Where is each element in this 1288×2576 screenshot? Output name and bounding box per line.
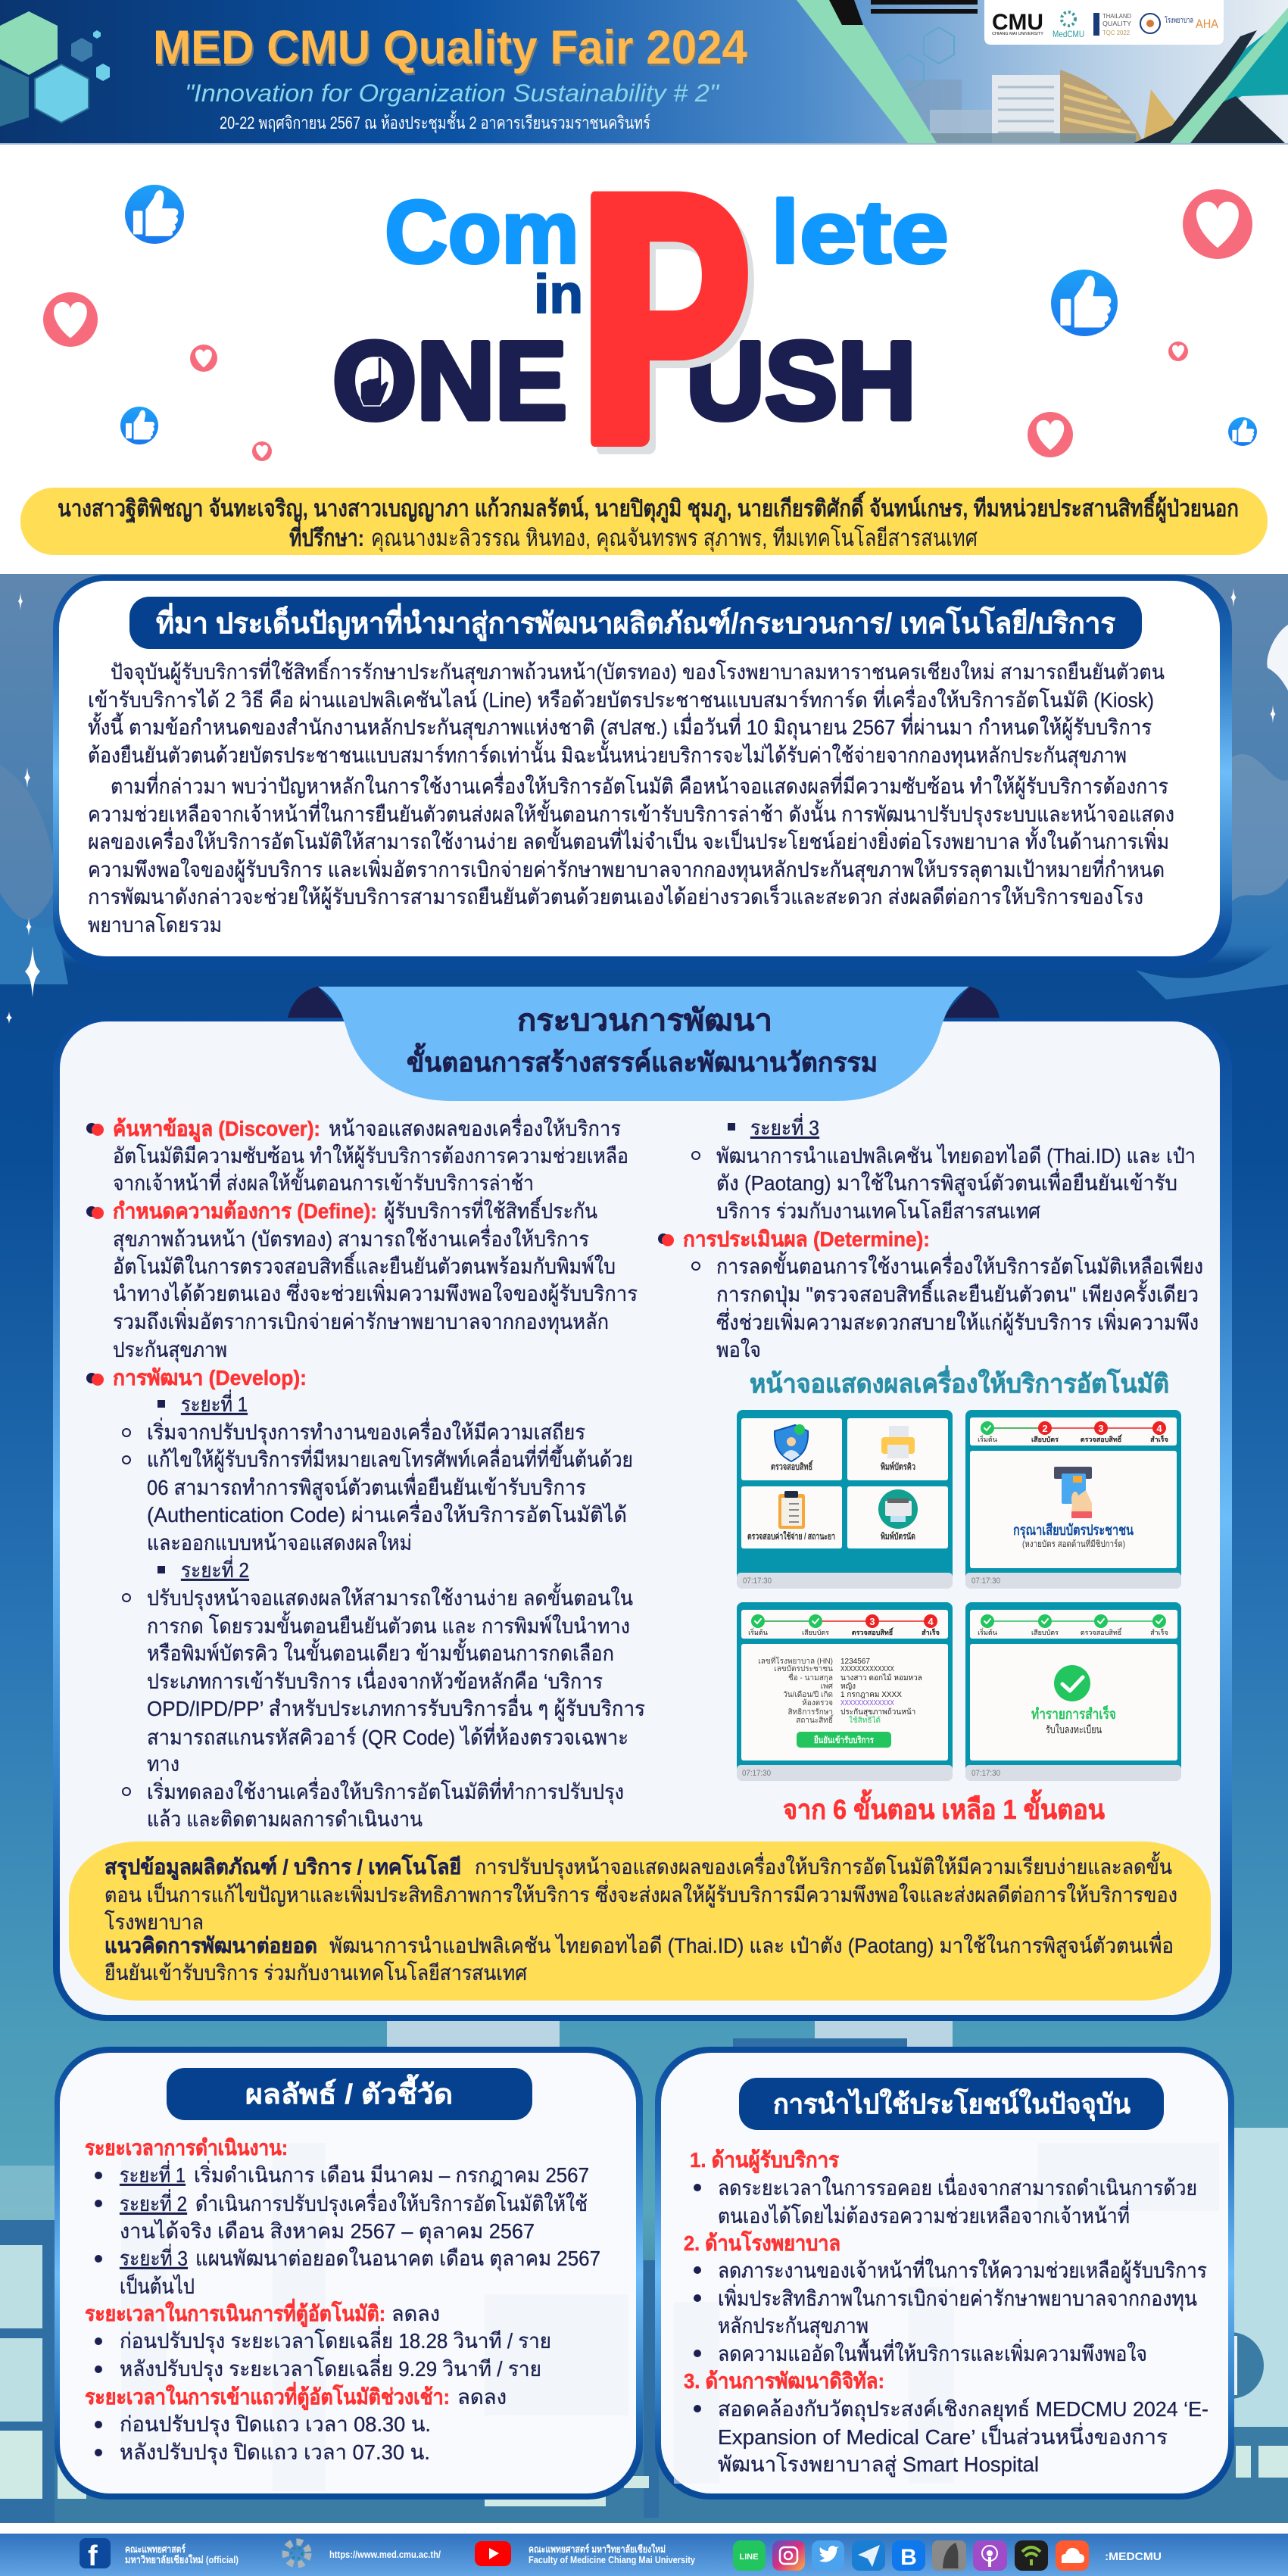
kiosk screen 2: insert card: สำเร็จ — [1150, 1434, 1168, 1443]
banner: partner logos: THAILAND — [1102, 13, 1131, 20]
text block: hospital: 2. ด้านโรงพยาบาล — [684, 2230, 840, 2255]
icon: copier — [878, 1489, 918, 1529]
kiosk screen 3: confirm details: สำเร็จ — [922, 1627, 940, 1636]
text block: hospital: เพิ่มประสิทธิภาพในการเบิกจ่ายค่ารักษาพยาบาลจากกองทุน — [718, 2284, 1197, 2312]
patient detail rows: ชื่อ - นามสกุล — [788, 1672, 833, 1683]
author and advisor pill — [20, 488, 1268, 555]
heading: kiosk screens: หน้าจอแสดงผลเครื่องให้บริการอัตโนมัติ — [750, 1365, 1169, 1399]
text block: service users: 1. ด้านผู้รับบริการ — [690, 2148, 839, 2173]
text block: kiosk walking time: หลังปรับปรุง ระยะเวลาโดยเฉลี่ย 9.29 วินาที / ราย — [120, 2354, 541, 2382]
kiosk screen 1: menu: ตรวจสอบสิทธิ์ — [771, 1460, 813, 1472]
text block: hospital: ลดความแออัดในพื้นที่ให้บริการและเพิ่มความพึงพอใจ — [718, 2338, 1147, 2365]
icon: clipboard — [778, 1491, 805, 1529]
kiosk screen 4: success: ตรวจสอบสิทธิ์ — [1081, 1627, 1123, 1636]
text block: operation period: แผนพัฒนาต่อยอดในอนาคต เดือน ตุลาคม 2567 — [195, 2246, 600, 2272]
banner: partner logos: MedCMU — [1053, 29, 1084, 39]
kiosk screen 4: success: รับใบลงทะเบียน — [1046, 1723, 1102, 1736]
text block: process steps left column: ปรับปรุงหน้าจอแสดงผลให้สามารถใช้งานง่าย ลดขั้นตอนใน — [147, 1583, 633, 1611]
summary box: ยืนยันเข้ารับบริการ ร่วมกับงานเทคโนโลยีสารสนเทศ — [104, 1960, 527, 1985]
text block: process steps left column: อัตโนมัติมีความซับซ้อน ทำให้ผู้รับบริการต้องการความช่วยเหลือ — [113, 1143, 628, 1169]
kiosk screen 3: confirm details: 1 กรกฎาคม XXXX — [840, 1691, 902, 1699]
kiosk screen 3: confirm details — [737, 1602, 953, 1781]
banner: title: MED CMU Quality Fair 2024 — [153, 21, 747, 74]
text block: hospital: ลดภาระงานของเจ้าหน้าที่ในการให้ความช่วยเหลือผู้รับบริการ — [718, 2256, 1207, 2284]
text block: process steps left column: เริ่มจากปรับปรุงการทำงานของเครื่องให้มีความเสถียร — [147, 1417, 585, 1445]
social media icons — [733, 2540, 1089, 2571]
text block: kiosk walking time: ลดลง — [391, 2302, 440, 2325]
text block: problem paragraphs: ทั้งนี้ ตามข้อกำหนดของสำนักงานหลักประกันสุขภาพแห่งชาติ (สปสช.) เมื่อวันที่ 10 มิถุนายน 2567 ที่ผ่านมา กำหนดให้ผู้รับบริการ — [88, 712, 1152, 741]
kiosk screen 3: confirm details: เริ่มต้น — [748, 1627, 768, 1636]
social handle: :MEDCMU — [1105, 2550, 1162, 2563]
bullet: discover — [86, 1123, 104, 1136]
text block: digital development — [684, 2369, 1208, 2478]
text block: process steps left column: ค้นหาข้อมูล (Discover): — [113, 1117, 320, 1142]
kiosk screen 3: confirm details: 3 — [869, 1616, 875, 1627]
banner: hexagon decoration — [0, 11, 110, 126]
text block: digital development: พัฒนาโรงพยาบาลสู่ Smart Hospital — [718, 2452, 1039, 2478]
logo title: Complete in One Push: lete — [771, 182, 949, 282]
text block: process steps left column: สามารถสแกนรหัสคิวอาร์ (QR Code) ได้ที่ห้องตรวจเฉพาะ — [147, 1723, 628, 1749]
text block: operation period: ระยะที่ 3 — [120, 2244, 188, 2270]
text block: process steps left column — [86, 1114, 645, 1831]
heading: benefits: การนำไปใช้ประโยชน์ในปัจจุบัน — [773, 2088, 1131, 2122]
text block: process steps left column: ระยะที่ 2 — [181, 1555, 249, 1582]
heading tab: development process: กระบวนการพัฒนา — [517, 1004, 772, 1037]
heading tab: development process — [288, 987, 1000, 1101]
bullet: develop — [86, 1373, 104, 1386]
text block: process steps right column: การกดปุ่ม "ตรวจสอบสิทธิ์และยืนยันตัวตน" เพียงครั้งเดียว — [716, 1279, 1199, 1308]
youtube label: คณะแพทยศาสตร์ มหาวิทยาลัยเชียงใหม่ — [529, 2543, 666, 2555]
summary box: แนวคิดการพัฒนาต่อยอด — [104, 1934, 317, 1957]
facebook label — [125, 2543, 239, 2565]
kiosk screen 1: menu — [737, 1410, 953, 1589]
text block: kiosk walking time: ระยะเวลาในการเนินการที่ตู้อัตโนมัติ: — [85, 2298, 385, 2327]
banner: partner logos: โรงพยาบาล — [1165, 15, 1193, 25]
text block: process steps right column: ระยะที่ 3 — [750, 1113, 819, 1140]
text block: process steps left column: นำทางได้ด้วยตนเอง ซึ่งจะช่วยเพิ่มความพึงพอใจของผู้รับบริการ — [113, 1279, 638, 1307]
text block: operation period: เป็นต้นไป — [120, 2273, 195, 2298]
youtube label: Faculty of Medicine Chiang Mai University — [529, 2554, 696, 2565]
banner: partner logos: CMU — [992, 10, 1043, 35]
text block: morning queue time: ลดลง — [457, 2385, 507, 2409]
text block: problem paragraphs: ผลของเครื่องให้บริการอัตโนมัติให้สามารถใช้งานง่าย ลดขั้นตอนที่ไม่จำเป็น จะเป็นประโยชน์อย่างยิ่งต่อโรงพยาบาล ทั้งในด้านการเพิ่ม — [88, 826, 1169, 853]
kiosk screen 1: menu: พิมพ์บัตรคิว — [881, 1461, 915, 1472]
logo title: Complete in One Push — [332, 119, 949, 525]
text block: process steps left column: จากเจ้าหน้าที่ ส่งผลให้ขั้นตอนการเข้ารับบริการล่าช้า — [113, 1168, 534, 1195]
banner: partner logos: AHA — [1196, 17, 1219, 31]
kiosk screen 2: insert card: ตรวจสอบสิทธิ์ — [1081, 1434, 1123, 1443]
kiosk screen 3: confirm details: XXXXXXXXXXXXX — [840, 1665, 894, 1673]
facebook label: คณะแพทยศาสตร์ — [125, 2543, 186, 2555]
text block: service users — [690, 2148, 1197, 2228]
kiosk screen 3: confirm details: 4 — [928, 1616, 934, 1627]
summary box: การปรับปรุงหน้าจอแสดงผลของเครื่องให้บริการอัตโนมัติให้มีความเรียบง่ายและลดขั้น — [475, 1851, 1172, 1880]
patient detail rows: เพศ — [821, 1683, 834, 1691]
text block: operation period: ระยะเวลาการดำเนินงาน: — [85, 2136, 288, 2160]
kiosk screen 2: insert card: กรุณาเสียบบัตรประชาชน — [1013, 1522, 1134, 1539]
text block: service users: ลดระยะเวลาในการรอคอย เนื่องจากสามารถดำเนินการด้วย — [718, 2173, 1197, 2200]
text block: process steps left column: ระยะที่ 1 — [181, 1389, 248, 1416]
text block: process steps left column: กำหนดความต้องการ (Define): — [113, 1199, 377, 1223]
heading: background and problem — [129, 597, 1142, 649]
text block: process steps right column: การลดขั้นตอนการใช้งานเครื่องให้บริการอัตโนมัติเหลือเพียง — [716, 1251, 1203, 1278]
kiosk screen 2: insert card: เริ่มต้น — [978, 1434, 997, 1443]
patient detail rows: สิทธิการรักษา — [788, 1708, 833, 1717]
kiosk screen 1: menu: พิมพ์บัตรนัด — [881, 1531, 915, 1542]
text block: process steps left column: และออกแบบหน้าจอแสดงผลใหม่ — [147, 1530, 412, 1555]
icon: shield — [775, 1424, 808, 1461]
banner: partner logos — [984, 0, 1224, 45]
author and advisor pill: ที่ปรึกษา: — [289, 521, 364, 551]
logo title: Complete in One Push: Com — [385, 182, 579, 282]
kiosk screen 4: success: เสียบบัตร — [1031, 1629, 1059, 1636]
kiosk screen 3: confirm details: 1234567 — [840, 1658, 870, 1666]
text block: process steps right column: พัฒนาการนำแอปพลิเคชัน ไทยดอทไอดี (Thai.ID) และ เป๋า — [716, 1144, 1196, 1168]
text block: process steps left column: แล้ว และติดตามผลการดำเนินงาน — [147, 1807, 423, 1831]
heading: outcomes — [167, 2068, 532, 2120]
icon: faculty logo — [285, 2542, 308, 2565]
footer bar — [0, 2534, 1288, 2576]
summary box: ตอน เป็นการแก้ไขปัญหาและเพิ่มประสิทธิภาพการให้บริการ ซึ่งจะส่งผลให้ผู้รับบริการมีความพึงพอใจและส่งผลดีต่อการให้บริการของ — [104, 1880, 1177, 1908]
banner: diagonal accent shapes — [797, 0, 1288, 143]
patient detail rows: วัน/เดือน/ปี เกิด — [783, 1690, 833, 1699]
logo title: Complete in One Push: USH — [686, 319, 916, 442]
summary box — [69, 1842, 1211, 2001]
text block: problem paragraphs: ความช่วยเหลือจากเจ้าหน้าที่ในการยืนยันตัวตนส่งผลให้ขั้นตอนการเข้ารับบริการล่าช้า ดังนั้น การพัฒนาปรับปรุงระบบและหน้าจอแสดง — [88, 799, 1174, 828]
text block: hospital — [684, 2230, 1207, 2365]
icon: facebook — [80, 2538, 111, 2572]
patient detail rows — [758, 1655, 834, 1725]
panel: development process — [53, 987, 1232, 2021]
icon: card insert — [1054, 1467, 1092, 1518]
logo title: Complete in One Push: in — [534, 264, 583, 325]
kiosk screen 1: menu: 07:17:30 — [743, 1576, 772, 1586]
panel: outcomes and indicators — [55, 2047, 643, 2500]
text block: operation period — [85, 2136, 600, 2298]
text block: process steps left column: การกด โดยรวมขั้นตอนยืนยันตัวตน และ การพิมพ์ใบนำทาง — [147, 1611, 630, 1638]
icon: youtube — [475, 2541, 511, 2566]
text block: process steps left column: อัตโนมัติในการตรวจสอบสิทธิ์และยืนยันตัวตนพร้อมกับพิมพ์ใบ — [113, 1251, 616, 1278]
text block: kiosk walking time: ก่อนปรับปรุง ระยะเวลาโดยเฉลี่ย 18.28 วินาที / ราย — [120, 2326, 551, 2354]
kiosk screen 3: confirm details: นางสาว ดอกไม้ หอมหวล — [840, 1673, 922, 1683]
text block: process steps left column: การพัฒนา (Develop): — [113, 1366, 307, 1389]
logo title: Complete in One Push: ONE — [332, 319, 567, 442]
text block: process steps left column: ประเภทการเข้ารับบริการ เนื่องจากหัวข้อหลักคือ ‘บริการ — [147, 1667, 603, 1693]
text block: process steps left column: รวมถึงเพิ่มอัตราการเบิกจ่ายค่ารักษาพยาบาลจากกองทุนหลัก — [113, 1307, 609, 1335]
text block: process steps left column: OPD/IPD/PP’ สำหรับประเภทการรับบริการอื่น ๆ ผู้รับบริการ — [147, 1694, 645, 1722]
text block: operation period: ดำเนินการปรับปรุงเครื่องให้บริการอัตโนมัติให้ใช้ — [195, 2189, 588, 2217]
kiosk screen 3: confirm details: เสียบบัตร — [802, 1629, 829, 1636]
social media icons: B — [900, 2545, 917, 2570]
text block: process steps left column: สุขภาพถ้วนหน้า (บัตรทอง) สามารถใช้งานเครื่องให้บริการ — [113, 1224, 589, 1252]
text block: process steps right column: ซึ่งช่วยเพิ่มความสะดวกสบายให้แก่ผู้รับบริการ เพิ่มความพึง — [716, 1308, 1199, 1336]
youtube label — [529, 2543, 696, 2565]
text block: morning queue time: ระยะเวลาในการเข้าแถวที่ตู้อัตโนมัติช่วงเช้า: — [85, 2381, 450, 2410]
text block: process steps left column: ทาง — [147, 1752, 179, 1776]
heading: background and problem: ที่มา ประเด็นปัญหาที่นำมาสู่การพัฒนาผลิตภัณฑ์/กระบวนการ/ เทคโนโลยี/บริการ — [156, 603, 1116, 641]
kiosk screen 1: menu: ตรวจสอบค่าใช้จ่าย / สถานะยา — [747, 1530, 835, 1542]
icon: facebook: f — [88, 2540, 98, 2572]
text block: process steps left column: เริ่มทดลองใช้งานเครื่องให้บริการอัตโนมัติที่ทำการปรับปรุง — [147, 1777, 624, 1805]
letter P: P — [577, 119, 753, 517]
text block: morning queue time: ก่อนปรับปรุง ปิดแถว เวลา 08.30 น. — [120, 2412, 431, 2437]
icon: pointing hand inside O — [360, 357, 389, 406]
banner: partner logos: TQC 2022 — [1102, 30, 1131, 36]
patient detail rows: เลขที่โรงพยาบาล (HN) — [758, 1655, 833, 1666]
text block: process steps right column: พอใจ — [716, 1337, 761, 1361]
patient detail rows: ห้องตรวจ — [802, 1698, 833, 1707]
panel: current benefits — [655, 2047, 1234, 2500]
callout: six steps to one step: จาก 6 ขั้นตอน เหลือ 1 ขั้นตอน — [783, 1789, 1105, 1825]
patient detail rows: สถานะสิทธิ์ — [796, 1714, 834, 1725]
kiosk screen 2: insert card: (หงายบัตร สอดด้านที่มีชิปการ์ด) — [1022, 1537, 1125, 1549]
kiosk screen 2: insert card: เสียบบัตร — [1031, 1436, 1059, 1443]
summary box: พัฒนาการนำแอปพลิเคชัน ไทยดอทไอดี (Thai.ID) และ เป๋าตัง (Paotang) มาใช้ในการพิสูจน์ตัวตนเพื่อ — [329, 1931, 1174, 1959]
text block: process steps left column: หน้าจอแสดงผลของเครื่องให้บริการ — [329, 1114, 621, 1140]
banner: theme subtitle: "Innovation for Organization Sustainability # 2" — [185, 80, 720, 107]
summary box: สรุปข้อมูลผลิตภัณฑ์ / บริการ / เทคโนโลยี — [104, 1854, 461, 1880]
kiosk screen 3: confirm details: 07:17:30 — [742, 1769, 771, 1778]
text block: operation period: งานได้จริง เดือน สิงหาคม 2567 – ตุลาคม 2567 — [120, 2219, 535, 2244]
text block: problem paragraphs — [88, 656, 1174, 937]
text block: operation period: ระยะที่ 2 — [120, 2189, 187, 2216]
kiosk screen 4: success: ทำรายการสำเร็จ — [1031, 1704, 1116, 1723]
patient detail rows: เลขบัตรประชาชน — [774, 1665, 833, 1673]
bullet: define — [86, 1206, 104, 1219]
text block: process steps right column: ตัง (Paotang) มาใช้ในการพิสูจน์ตัวตนเพื่อยืนยันเข้ารับ — [716, 1168, 1177, 1196]
banner — [0, 0, 1288, 145]
kiosk screen 2: insert card: 4 — [1156, 1423, 1162, 1434]
letter P shadow: P — [583, 126, 759, 525]
text block: kiosk walking time — [85, 2298, 551, 2382]
heading: outcomes: ผลลัพธ์ / ตัวชี้วัด — [245, 2074, 453, 2110]
text block: problem paragraphs: ความพึงพอใจของผู้รับบริการ และเพิ่มอัตราการเบิกจ่ายค่ารักษาพยาบาลจากกองทุนหลักประกันสุขภาพให้บรรลุตามเป้าหมายที่กำหนด — [88, 855, 1165, 883]
text block: process steps left column: ผู้รับบริการที่ใช้สิทธิ์ประกัน — [384, 1196, 597, 1224]
text block: operation period: ระยะที่ 1 — [120, 2160, 186, 2187]
text block: process steps left column: แก้ไขให้ผู้รับบริการที่มีหมายเลขโทรศัพท์เคลื่อนที่ที่ขึ้นต้นด้วย — [147, 1444, 633, 1473]
text block: digital development: Expansion of Medical Care’ เป็นส่วนหนึ่งของการ — [718, 2422, 1168, 2449]
text block: process steps left column: 06 สามารถทำการพิสูจน์ตัวตนเพื่อยืนยันเข้ารับบริการ — [147, 1473, 586, 1501]
banner: campus skyline — [848, 27, 1175, 143]
heading: benefits — [739, 2078, 1164, 2130]
text block: process steps left column: หรือพิมพ์บัตรคิว ในขั้นตอนเดียว ข้ามขั้นตอนการกดเลือก — [147, 1638, 614, 1665]
text block: service users: ตนเองได้โดยไม่ต้องรอความช่วยเหลือจากเจ้าหน้าที่ — [718, 2201, 1130, 2228]
text block: hospital: หลักประกันสุขภาพ — [718, 2314, 869, 2339]
kiosk screen 2: insert card: 2 — [1042, 1423, 1048, 1434]
kiosk screen 2: insert card — [965, 1410, 1181, 1589]
kiosk screen 3: confirm details: ยืนยันเข้ารับบริการ — [814, 1735, 874, 1745]
text block: digital development: 3. ด้านการพัฒนาดิจิทัล: — [684, 2369, 884, 2393]
kiosk screen 3: confirm details: ประกันสุขภาพถ้วนหน้า — [840, 1707, 915, 1717]
author and advisor pill: คุณนางมะลิวรรณ หินทอง, คุณจันทรพร สุภาพร, ทีมเทคโนโลยีสารสนเทศ — [371, 525, 978, 553]
kiosk screen 4: success — [965, 1602, 1181, 1781]
text block: process steps left column: (Authentication Code) ผ่านเครื่องให้บริการอัตโนมัติได้ — [147, 1500, 627, 1527]
text block: process steps right column — [658, 1113, 1203, 1361]
kiosk screen 4: success: 07:17:30 — [971, 1769, 1000, 1778]
kiosk screen 4: success: เริ่มต้น — [978, 1627, 997, 1636]
text block: problem paragraphs: เข้ารับบริการได้ 2 วิธี คือ ผ่านแอปพลิเคชันไลน์ (Line) หรือด้วยบัตรประชาชนแบบสมาร์ทการ์ด ที่เครื่องให้บริการอัตโนมัติ (Kiosk) — [88, 685, 1154, 712]
kiosk screen 3: confirm details: ใช้สิทธิได้ — [849, 1716, 881, 1725]
text block: process steps right column: บริการ ร่วมกับงานเทคโนโลยีสารสนเทศ — [716, 1199, 1040, 1223]
text block: process steps right column: การประเมินผล (Determine): — [683, 1227, 930, 1251]
text block: digital development: สอดคล้องกับวัตถุประสงค์เชิงกลยุทธ์ MEDCMU 2024 ‘E- — [718, 2397, 1208, 2422]
kiosk screen 4: success: สำเร็จ — [1150, 1627, 1168, 1636]
text block: problem paragraphs: การพัฒนาดังกล่าวจะช่วยให้ผู้รับบริการสามารถยืนยันตัวตนด้วยตนเองได้อย่างรวดเร็วและสะดวก ส่งผลดีต่อการให้บริการของโรง — [88, 884, 1143, 910]
summary box: โรงพยาบาล — [104, 1910, 204, 1934]
banner: partner logos: CHIANG MAI UNIVERSITY — [992, 32, 1044, 36]
kiosk screen 3: confirm details: หญิง — [840, 1683, 856, 1691]
banner: partner logos: QUALITY — [1102, 20, 1132, 27]
text block: problem paragraphs: ต้องยืนยันตัวตนด้วยบัตรประชาชนแบบสมาร์ทการ์ดเท่านั้น มิฉะนั้นหน่วยบริการจะไม่ได้รับค่าใช้จ่ายจากกองทุนหลักประกันสุขภาพ — [88, 740, 1127, 769]
facebook label: มหาวิทยาลัยเชียงใหม่ (official) — [125, 2553, 239, 2565]
banner: date and venue: 20-22 พฤศจิกายน 2567 ณ ห้องประชุมชั้น 2 อาคารเรียนรวมราชนครินทร์ — [220, 111, 650, 133]
icon: success check — [1054, 1665, 1090, 1701]
website link: https://www.med.cmu.ac.th/ — [329, 2549, 441, 2560]
floating like and heart icons — [43, 185, 1257, 461]
bullet: determine — [658, 1233, 674, 1246]
text block: process steps left column: ประกันสุขภาพ — [113, 1338, 227, 1363]
text block: operation period: เริ่มดำเนินการ เดือน มีนาคม – กรกฎาคม 2567 — [194, 2160, 589, 2187]
kiosk screen 3: confirm details: ตรวจสอบสิทธิ์ — [852, 1627, 894, 1636]
social media icons: LINE — [739, 2553, 759, 2562]
text block: problem paragraphs: ตามที่กล่าวมา พบว่าปัญหาหลักในการใช้งานเครื่องให้บริการอัตโนมัติ คือหน้าจอแสดงผลที่มีความซับซ้อน ทำให้ผู้รับบริการต้องการ — [111, 772, 1168, 800]
icon: printer — [881, 1426, 915, 1458]
text block: problem paragraphs: พยาบาลโดยรวม — [88, 912, 222, 937]
kiosk screen 3: confirm details: XXXXXXXXXXXXX — [840, 1699, 894, 1707]
kiosk screen 2: insert card: 3 — [1098, 1423, 1104, 1434]
text block: morning queue time: หลังปรับปรุง ปิดแถว เวลา 07.30 น. — [120, 2440, 430, 2465]
panel: background and problem statement — [53, 575, 1232, 970]
text block: problem paragraphs: ปัจจุบันผู้รับบริการที่ใช้สิทธิ์การรักษาประกันสุขภาพถ้วนหน้า(บัตรทอง) ของโรงพยาบาลมหาราชนครเชียงใหม่ สามารถยืนยันตัวตน — [111, 656, 1165, 685]
text block: morning queue time — [85, 2381, 507, 2465]
kiosk screen 2: insert card: 07:17:30 — [971, 1576, 1000, 1586]
heading tab: development process: ขั้นตอนการสร้างสรรค์และพัฒนานวัตกรรม — [407, 1043, 878, 1077]
